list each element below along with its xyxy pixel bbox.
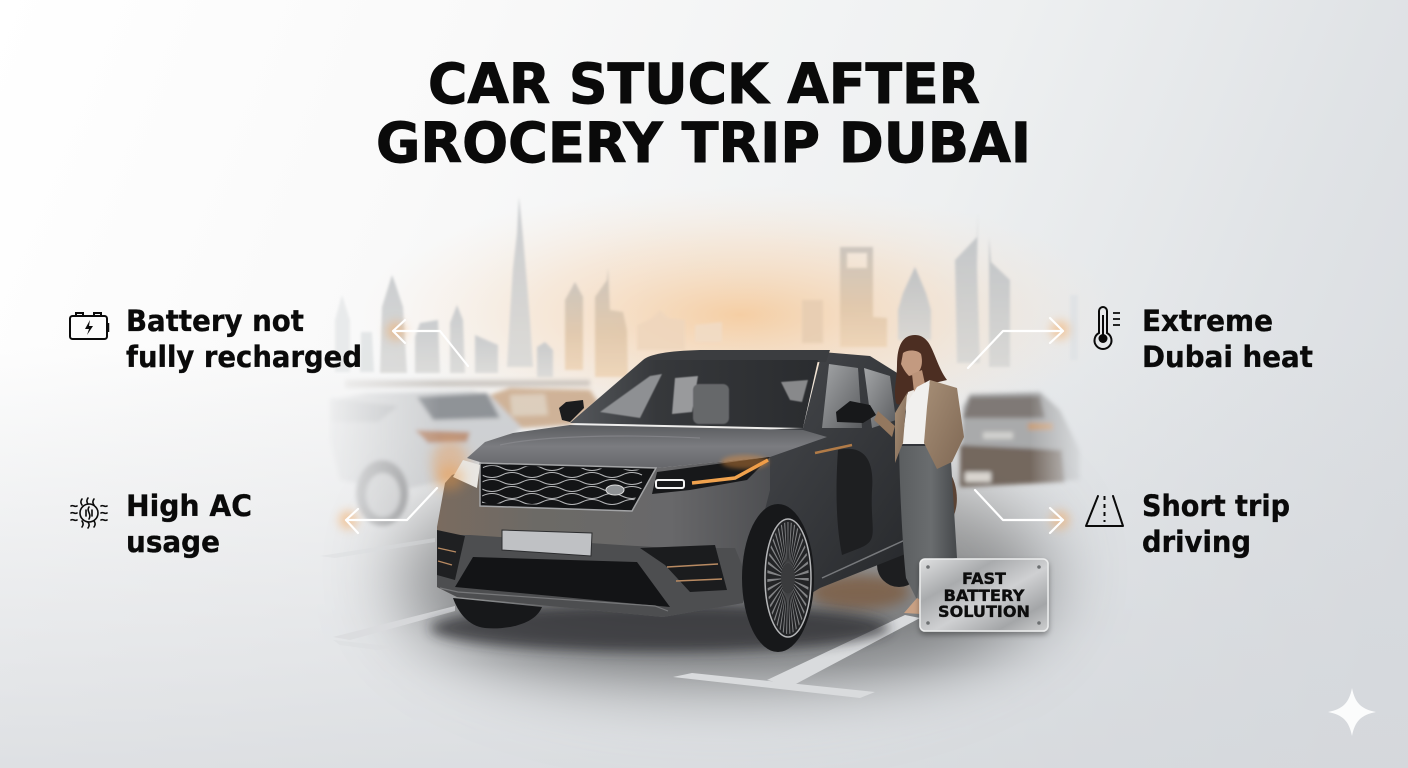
front right wheel: [742, 504, 814, 652]
arrow: heat: [968, 318, 1063, 368]
icon: AC heat: [71, 498, 107, 528]
left headlight: [436, 460, 480, 490]
orange glow by left headlight: [432, 440, 468, 484]
label: Extreme: [1142, 304, 1273, 338]
arrows: [339, 318, 1069, 533]
label: Dubai heat: [1142, 340, 1313, 374]
car side body: [745, 352, 908, 600]
metal badge: fast battery solution: [920, 559, 1048, 631]
right headlight: [652, 455, 770, 494]
label: [126, 489, 252, 559]
icon: thermometer: [1094, 307, 1120, 349]
blouse: [902, 380, 930, 444]
arrow: short trip: [975, 490, 1063, 533]
seats in cabin: [600, 374, 808, 424]
badge screws: [926, 565, 1041, 625]
main car: [436, 350, 921, 652]
cause: high AC usage: [71, 489, 252, 559]
hood crease highlight: [500, 436, 700, 445]
sparkle watermark: [1328, 688, 1376, 736]
cause: short trip driving: [1086, 489, 1290, 559]
rear wheel: [877, 543, 921, 587]
grille: [480, 463, 656, 511]
label: usage: [126, 525, 220, 559]
side windows: [822, 364, 862, 428]
left vent: [437, 530, 465, 580]
face: [901, 350, 922, 376]
label: High AC: [126, 489, 252, 523]
label: fully recharged: [126, 340, 362, 374]
parking lines: [320, 538, 920, 698]
vent copper strips: [667, 564, 722, 581]
icon: road: [1086, 496, 1123, 526]
right side vent: [640, 545, 727, 592]
lower intake: [455, 557, 670, 607]
blurred background car right: [960, 392, 1080, 487]
lower bumper dark: [437, 535, 748, 617]
blazer: [895, 393, 907, 463]
front splitter: [440, 588, 668, 611]
bumper: [437, 457, 770, 617]
woman: [874, 335, 964, 614]
trousers: [899, 445, 957, 600]
front left tire: [453, 598, 542, 628]
badge text: FAST: [962, 569, 1006, 588]
label: driving: [1142, 525, 1251, 559]
badge text: SOLUTION: [938, 602, 1030, 621]
hazy Dubai skyline: [335, 185, 1120, 445]
arrow: AC: [346, 488, 437, 533]
title: CAR STUCK AFTER: [428, 52, 980, 116]
cause: extreme Dubai heat: [1094, 304, 1313, 374]
icon: battery: [70, 313, 108, 339]
warm ground reflection: [810, 575, 910, 609]
left mirror: [559, 400, 584, 422]
windshield: [570, 360, 818, 428]
door reflection: [837, 449, 873, 555]
title: GROCERY TRIP DUBAI: [376, 111, 1031, 175]
label: Battery not: [126, 304, 304, 338]
roof: [643, 350, 830, 364]
badge text: [938, 569, 1030, 621]
sill highlight: [822, 540, 905, 578]
label: [1142, 489, 1290, 559]
foot: [904, 598, 921, 614]
label: [1142, 304, 1313, 374]
hood: [467, 425, 827, 468]
title: [376, 52, 1031, 175]
badge text: BATTERY: [944, 586, 1025, 605]
main car shadow: [430, 604, 890, 652]
blurred background car left: [330, 380, 598, 526]
neck: [912, 370, 925, 392]
coat tail: [948, 470, 957, 515]
arrow: battery: [393, 320, 468, 366]
belt: [901, 444, 926, 446]
label: Short trip: [1142, 489, 1290, 523]
arrow glow: [339, 321, 1069, 529]
number plate: [502, 530, 592, 556]
parking lot ground: [358, 444, 1090, 725]
left vent strips: [438, 548, 456, 565]
right mirror: [836, 401, 876, 423]
hair: [895, 335, 947, 405]
arm: [874, 411, 895, 437]
label: [126, 304, 362, 374]
cause: battery not fully recharged: [70, 304, 362, 374]
